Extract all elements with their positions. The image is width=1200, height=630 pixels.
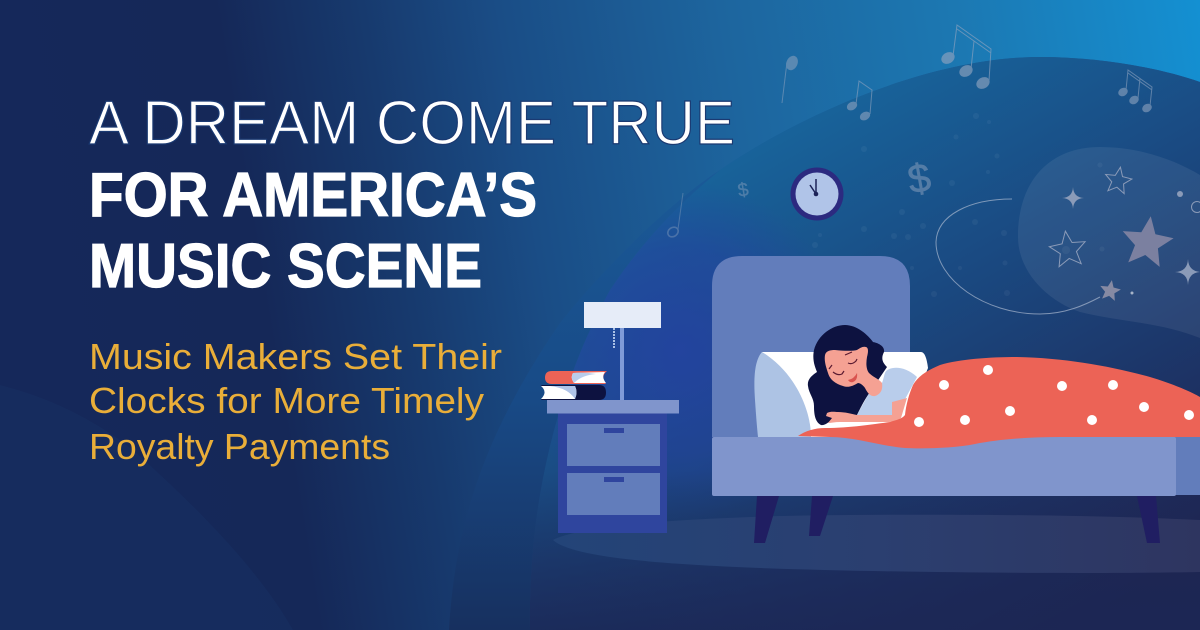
title: FOR AMERICA’S (89, 161, 537, 230)
books (541, 371, 607, 400)
central glow (568, 213, 756, 492)
icon: shooting star trail (936, 199, 1100, 314)
icon: triple music note (939, 25, 992, 91)
sleeping woman (808, 325, 917, 425)
blanket (798, 357, 1200, 448)
icon: triple music note right (1117, 70, 1153, 114)
icon: double music note (845, 81, 872, 122)
star dust (812, 113, 1104, 297)
blanket polka dots (914, 365, 1194, 427)
icon: single music note (782, 54, 800, 103)
bed (712, 256, 1200, 543)
closed eyes and smile (829, 352, 857, 375)
shirt (857, 368, 917, 416)
icon: stars (1047, 165, 1200, 302)
subtitle: Clocks for More Timely (89, 380, 484, 421)
hair (808, 325, 887, 425)
floor shadow (553, 515, 1200, 573)
icon: faint note (666, 193, 683, 239)
lamp (584, 302, 661, 400)
icon: small dollar sign: $ (736, 179, 751, 202)
subtitle: Royalty Payments (89, 426, 390, 467)
background blob (530, 57, 1200, 630)
dream cloud (1018, 147, 1200, 338)
nightstand (547, 400, 679, 533)
lower shade (530, 508, 844, 630)
icon: large dollar sign: $ (905, 155, 934, 203)
outer background band (449, 57, 1200, 630)
subtitle (89, 336, 502, 467)
title: A DREAM COME TRUE (89, 89, 735, 158)
icon: wall clock (790, 168, 844, 220)
arm (826, 398, 907, 423)
pillow (754, 352, 928, 437)
title (89, 89, 735, 301)
title: MUSIC SCENE (89, 232, 482, 301)
subtitle: Music Makers Set Their (89, 336, 502, 377)
neck and face (825, 347, 882, 396)
